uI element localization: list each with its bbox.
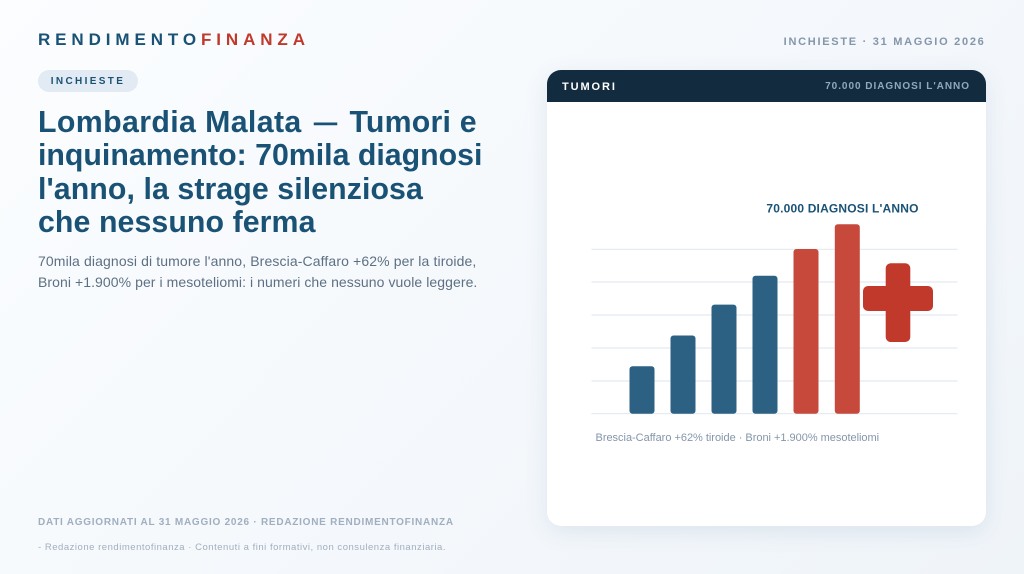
subtitle: Broni +1.900% per i mesoteliomi: i numeri che nessuno vuole leggere. xyxy=(38,274,477,290)
title: inquinamento: 70mila diagnosi xyxy=(38,139,482,172)
subtitle: 70mila diagnosi di tumore l'anno, Brescia-Caffaro +62% per la tiroide, xyxy=(38,253,476,269)
footer disclaimer: - Redazione rendimentofinanza · Contenuti a fini formativi, non consulenza finanziaria. xyxy=(38,542,446,553)
category pill xyxy=(38,70,138,92)
title xyxy=(38,106,482,239)
category pill: INCHIESTE xyxy=(51,76,125,87)
chart callout: 70.000 DIAGNOSI L'ANNO xyxy=(766,202,919,216)
subtitle xyxy=(38,253,477,290)
bar chart xyxy=(592,202,958,444)
brand logo: RENDIMENTOFINANZA xyxy=(38,30,310,49)
icon: medical cross xyxy=(863,263,933,342)
card header xyxy=(547,70,986,102)
title: che nessuno ferma xyxy=(38,206,316,239)
bars xyxy=(630,224,860,414)
title: l'anno, la strage silenziosa xyxy=(38,173,423,206)
title: Lombardia Malata — Tumori e xyxy=(38,106,477,139)
chart caption: Brescia-Caffaro +62% tiroide · Broni +1.900% mesoteliomi xyxy=(596,432,879,444)
date line: INCHIESTE · 31 MAGGIO 2026 xyxy=(784,36,986,48)
panel: chart card xyxy=(547,70,986,526)
footer update line: DATI AGGIORNATI AL 31 MAGGIO 2026 · REDAZIONE RENDIMENTOFINANZA xyxy=(38,517,454,528)
header stat: 70.000 DIAGNOSI L'ANNO xyxy=(825,81,970,92)
header label: TUMORI xyxy=(562,81,617,93)
